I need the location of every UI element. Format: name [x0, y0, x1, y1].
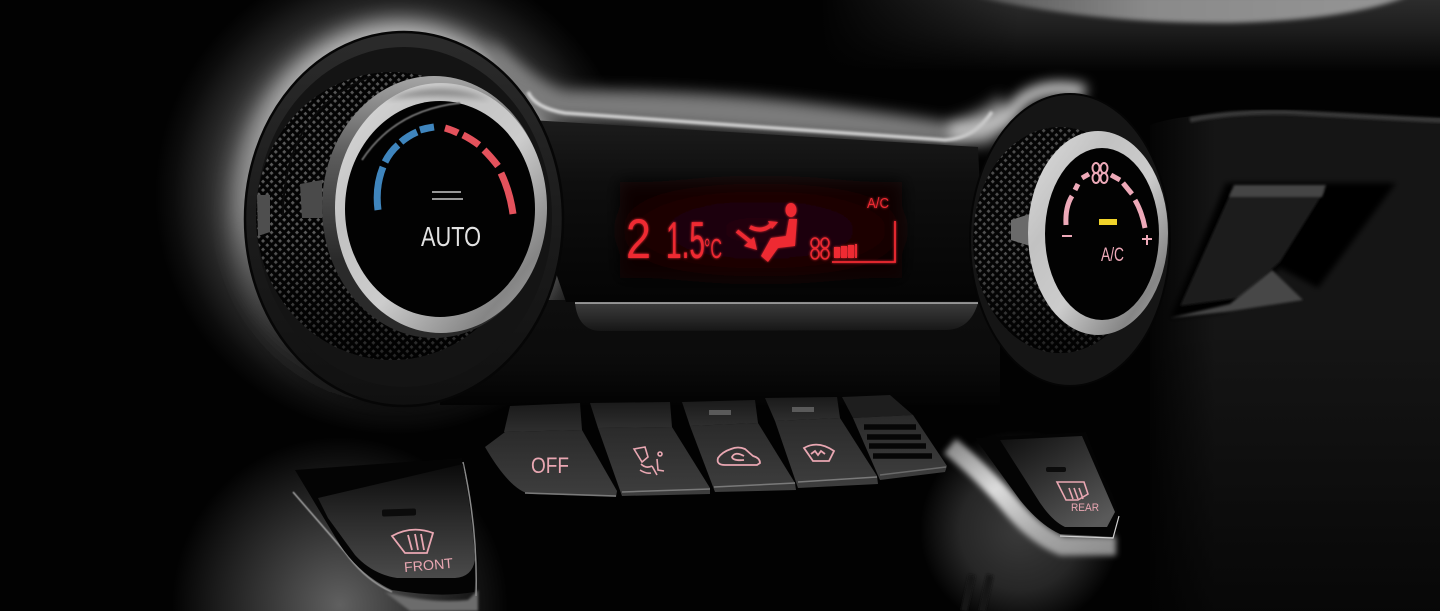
windshield max button — [765, 397, 878, 488]
temperature unit: °C — [704, 233, 722, 264]
button row — [485, 395, 947, 497]
center floor cables — [964, 575, 990, 611]
vent block — [842, 395, 947, 480]
left dial knurled ring — [256, 72, 528, 360]
right dial — [970, 94, 1170, 386]
recirculation button — [682, 400, 796, 492]
silver halo around left dial — [234, 22, 566, 402]
display red backlight — [620, 182, 902, 278]
seat heat button — [590, 402, 710, 496]
left dial chrome ring — [335, 83, 547, 333]
rear defrost lever — [920, 430, 1120, 611]
icon: front defrost — [392, 530, 433, 553]
minus and plus marks — [1062, 235, 1152, 245]
right dial screen — [1045, 148, 1159, 320]
front button trough — [295, 458, 478, 595]
set point marks — [432, 192, 463, 199]
right dial outer bezel — [970, 94, 1170, 386]
icon: rear defrost — [1057, 482, 1088, 500]
front defrost lever — [170, 435, 510, 611]
recess shadow — [1170, 183, 1396, 318]
front indicator — [382, 508, 416, 517]
right dial knurled ring — [973, 127, 1147, 353]
REAR label: REAR — [1071, 502, 1099, 514]
front lever bottom rim — [385, 590, 478, 611]
right dial chrome ring — [1028, 131, 1168, 335]
AUTO label: AUTO — [421, 221, 481, 252]
left dial chrome skirt — [322, 76, 546, 338]
fan speed scale — [1066, 174, 1145, 228]
left dial inner groove — [256, 47, 552, 387]
yellow indicator — [1099, 219, 1117, 225]
left dial notches — [257, 195, 270, 236]
left dial outer bezel — [245, 32, 563, 406]
left dial screen reflection — [362, 103, 460, 160]
front lever rim light — [293, 492, 392, 592]
A/C label: A/C — [867, 195, 889, 212]
lower silver trim bar — [575, 303, 978, 331]
temperature decimals: 1.5 — [666, 212, 705, 270]
OFF button: OFF — [531, 453, 569, 478]
chrome top shade — [385, 89, 490, 100]
FRONT label: FRONT — [403, 555, 454, 575]
rear button trough — [975, 432, 1118, 537]
left dial — [245, 32, 563, 406]
handle lower wedge — [1170, 270, 1303, 318]
halo around right dial — [950, 89, 1085, 132]
OFF button — [485, 403, 617, 497]
left dial screen — [345, 101, 535, 317]
front lever housing — [170, 435, 510, 611]
door handle — [1180, 190, 1325, 306]
icon: fan speed bars — [811, 221, 895, 262]
icon: seated person with airflow — [737, 203, 797, 262]
rear lever housing — [920, 430, 1120, 611]
temperature value: 2 — [626, 207, 651, 270]
A/C label: A/C — [1101, 245, 1124, 266]
dashboard top surface — [820, 0, 1440, 72]
temperature scale: red — [445, 128, 513, 214]
rear indicator — [1046, 467, 1066, 472]
wide console glow at left — [155, 0, 635, 435]
display panel — [530, 120, 985, 302]
rear lever silver strip — [950, 446, 1116, 546]
right dial notch — [1011, 214, 1030, 246]
silver shoulder over display — [490, 40, 1015, 145]
console body below display — [440, 300, 1000, 405]
front button pad — [318, 464, 475, 578]
right side trim panel — [1150, 112, 1440, 611]
knurl break — [283, 76, 372, 216]
icon: fan — [1092, 163, 1108, 183]
climate readout — [626, 195, 895, 270]
temperature scale: blue — [377, 127, 434, 210]
rear button pad — [1000, 436, 1115, 527]
